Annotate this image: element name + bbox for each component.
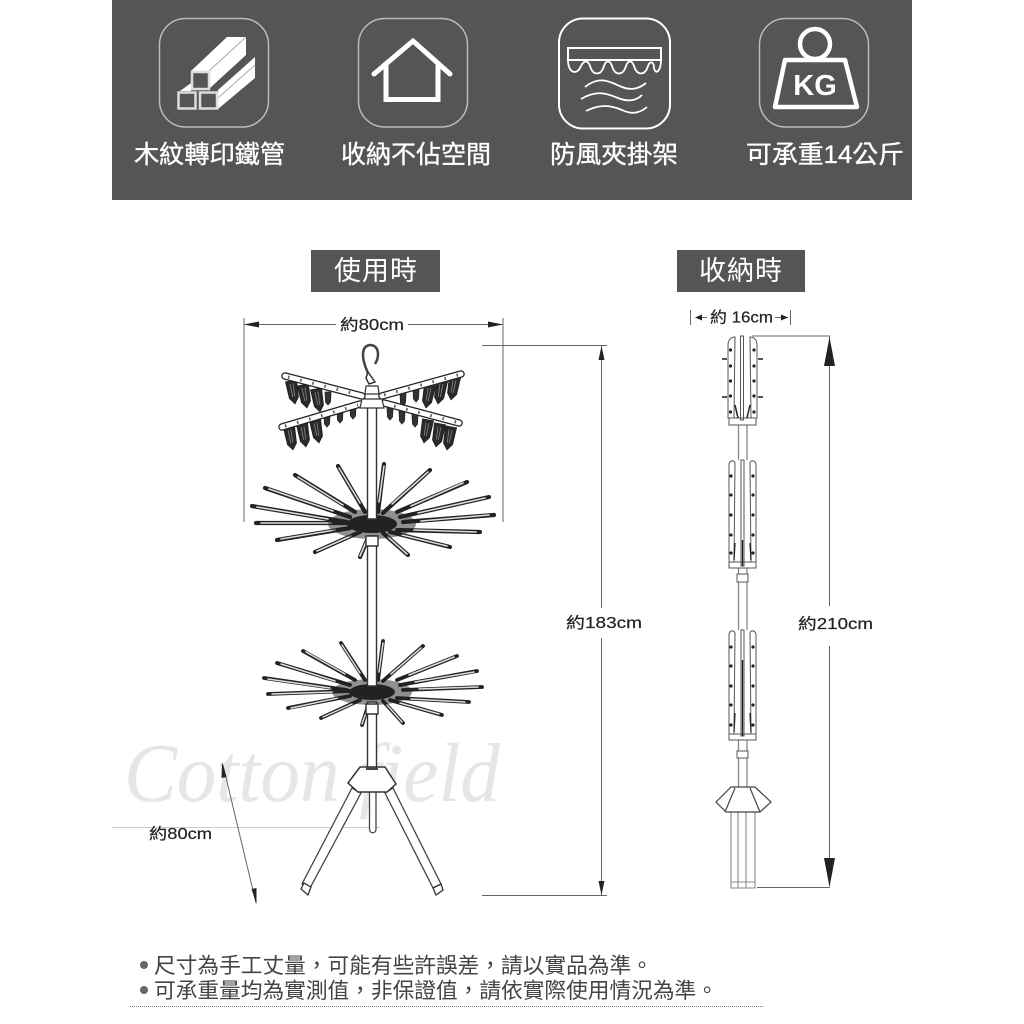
icon: house — [358, 18, 468, 127]
tag: stored: 收納時 — [699, 256, 783, 286]
top clip arms — [282, 374, 461, 451]
drawing: folded hanger — [716, 336, 771, 888]
collars — [737, 574, 748, 758]
watermark: Cotton field — [124, 727, 501, 820]
folded section 2 — [729, 460, 756, 568]
icon: metal tubes — [160, 18, 268, 127]
header band — [112, 0, 912, 200]
dimension: folded width 16cm — [690, 308, 790, 326]
poles — [738, 425, 747, 790]
folded section 3 — [729, 630, 756, 740]
hook — [363, 345, 378, 373]
dimension: width 80cm — [244, 316, 503, 522]
tripod base — [348, 767, 396, 792]
label: wind clip hanger: 防風夾掛架 — [550, 141, 678, 169]
label: space saving: 收納不佔空間 — [341, 141, 491, 169]
dimension: height 183cm — [482, 346, 642, 896]
dimension: leg spread 80cm — [112, 762, 380, 904]
drawing: hanger in use — [252, 345, 494, 895]
footnotes — [140, 953, 718, 1003]
footnotes: 尺寸為手工丈量，可能有些許誤差，請以實品為準。 — [154, 953, 653, 978]
folded section 1 — [722, 336, 763, 425]
icon: wind resistant clips — [559, 18, 670, 128]
hub — [360, 386, 384, 408]
label: wood grain tube: 木紋轉印鐵管 — [134, 141, 285, 169]
footnotes: 可承重量均為實測值，非保證值，請依實際使用情況為準。 — [154, 978, 718, 1003]
folded tripod legs — [731, 812, 755, 888]
label: load 14 kg: 可承重14公斤 — [746, 141, 904, 169]
dimension: leg spread 80cm: 約80cm — [149, 825, 212, 843]
lower spoke wheel — [264, 641, 482, 725]
icon: weight 14 kg — [760, 18, 868, 127]
upper spoke wheel — [252, 464, 494, 557]
label: KG: KG — [793, 70, 837, 102]
dimension: height 183cm: 約183cm — [566, 614, 642, 632]
tripod legs — [301, 788, 443, 895]
pole — [366, 405, 378, 768]
tag: in use: 使用時 — [334, 256, 418, 286]
dimension: folded width 16cm: 約 16cm — [710, 308, 773, 326]
folded tripod base — [716, 787, 771, 812]
dimension: folded height 210cm — [752, 336, 873, 888]
tag: in use — [311, 250, 440, 292]
dimension: folded height 210cm: 約210cm — [798, 615, 873, 633]
dimension: width 80cm: 約80cm — [340, 316, 404, 334]
tag: stored — [677, 250, 805, 292]
